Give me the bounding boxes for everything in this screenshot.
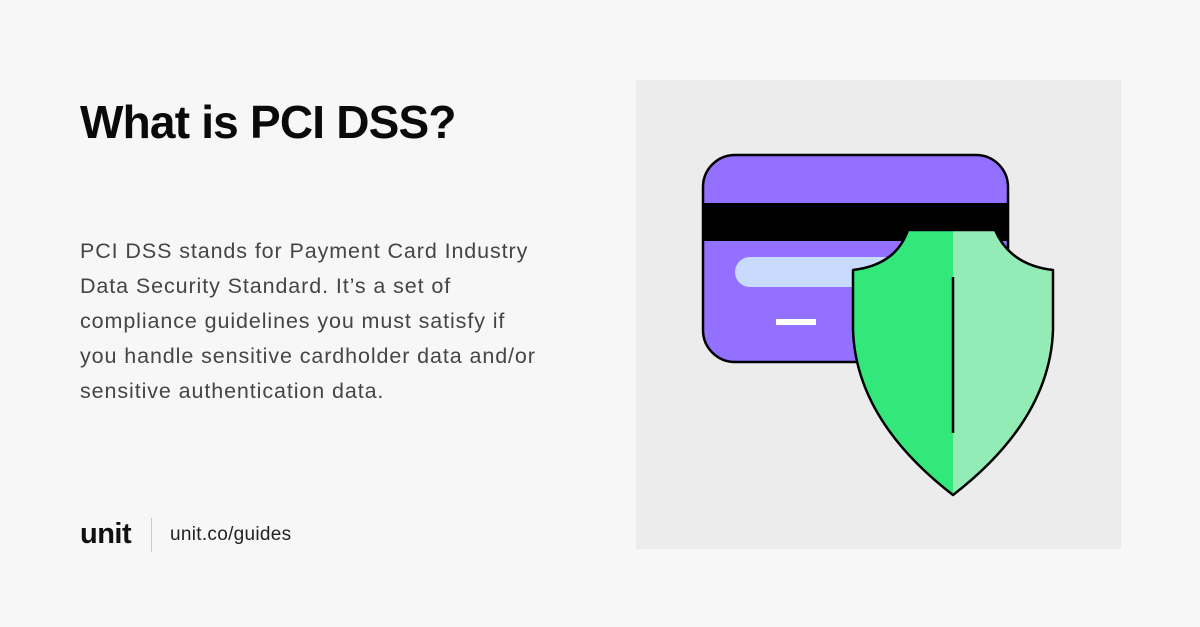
body text: sensitive authentication data. — [80, 379, 384, 403]
body text: PCI DSS stands for Payment Card Industry — [80, 239, 528, 263]
logo: unit: unit — [80, 518, 131, 550]
icon: shield — [853, 230, 1053, 495]
panel: illustration — [636, 80, 1121, 549]
body text: compliance guidelines you must satisfy if — [80, 309, 505, 333]
footer: logo and url — [80, 518, 291, 552]
body text: you handle sensitive cardholder data and/or — [80, 344, 536, 368]
url text: unit.co/guides — [170, 524, 291, 545]
body text: Data Security Standard. It’s a set of — [80, 274, 451, 298]
body text — [80, 239, 536, 403]
icon: credit card — [702, 155, 1009, 362]
title: What is PCI DSS? — [80, 96, 456, 148]
